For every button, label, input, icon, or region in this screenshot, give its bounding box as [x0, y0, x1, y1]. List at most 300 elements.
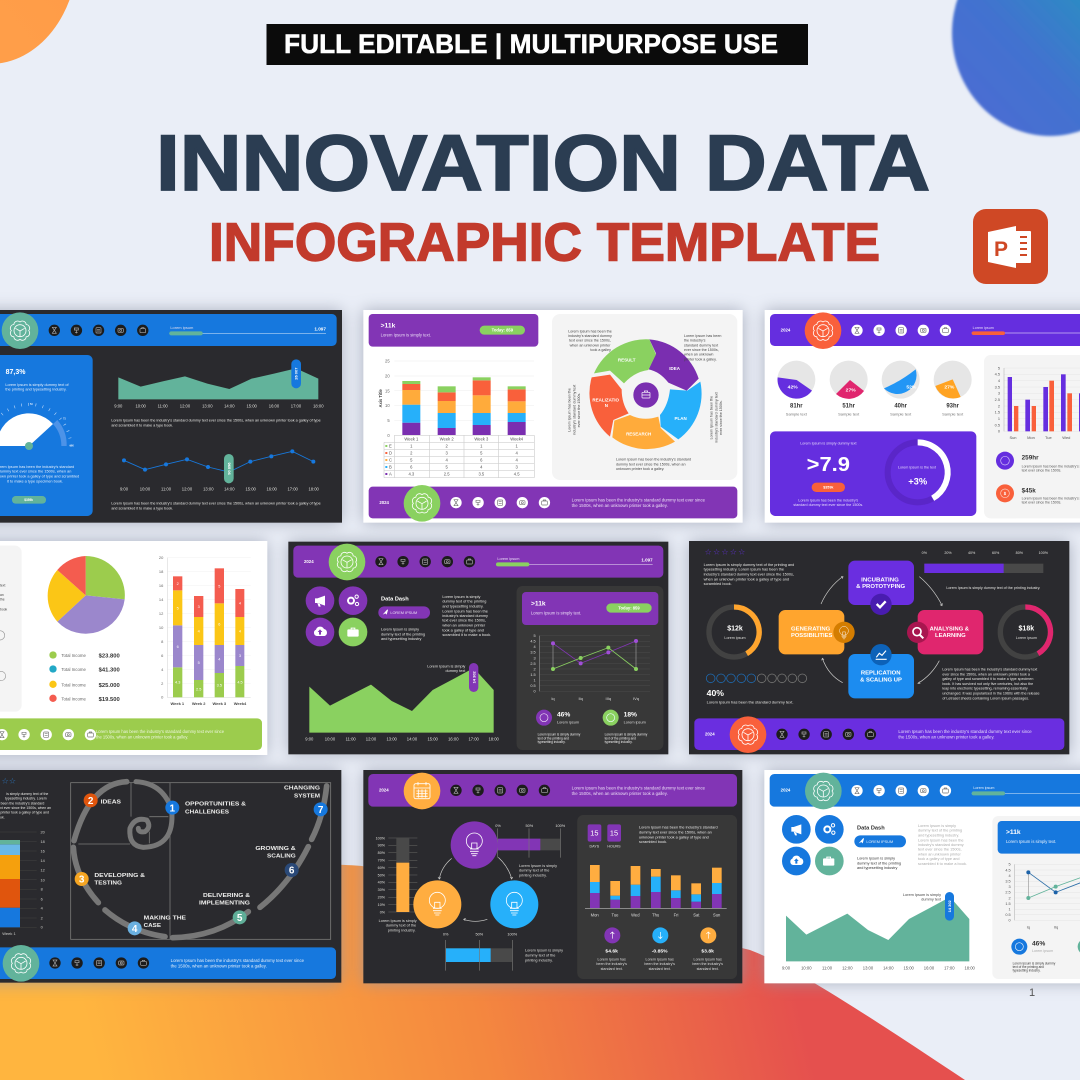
- stacked bar remnant: 16: [41, 849, 45, 853]
- slide 4: white pie chart: [0, 541, 267, 755]
- cycle panel: when an unknown: [684, 353, 713, 357]
- right panel: DAYS: [589, 844, 600, 848]
- area chart: and scrambled it to make a type book.: [111, 423, 173, 427]
- stacked bars: 4.5: [237, 680, 243, 684]
- cycle panel: ever since the 1500s.: [719, 400, 723, 435]
- purple KPI panel: $359k: [823, 486, 834, 490]
- data dash text: [854, 824, 967, 870]
- body text: unchanged. It was popularised in the 1960s with the release: [942, 691, 1040, 695]
- line chart: 15:00: [245, 486, 257, 491]
- stacked bar remnant: 2: [41, 916, 43, 920]
- line chart: 12:00: [182, 486, 193, 491]
- right panel with bars: 1.5: [995, 411, 1000, 415]
- thermometer bar: 20%: [378, 896, 386, 900]
- right panel with bars: 3.5: [995, 385, 1000, 389]
- data table: 5: [480, 451, 483, 456]
- progress bar: 0%: [922, 551, 928, 555]
- right panel: Lorem Ipsum is simply text.: [1006, 839, 1056, 844]
- data dash text: and typesetting industry.: [442, 605, 484, 609]
- area chart: 12:00: [842, 965, 853, 970]
- line chart: 11:00: [161, 486, 172, 491]
- gauge panel: 50: [30, 402, 33, 406]
- data dash text: and typesetting industry.: [918, 834, 959, 838]
- right panel: $4.6k: [605, 948, 618, 954]
- gradient wave background, bottom: [0, 864, 965, 1080]
- slide 6: dark cycle process: [689, 541, 1069, 754]
- area chart: 17:00: [468, 737, 480, 742]
- decorative blue blob, top right: [952, 0, 1080, 136]
- right panel with bars: Sun: [1009, 435, 1017, 440]
- area chart: 18:00: [488, 737, 500, 742]
- stacked bars: 12: [159, 611, 164, 616]
- right panel: Lorem Ipsum has: [646, 957, 674, 961]
- stacked bars: Week 1: [170, 701, 185, 706]
- stacked bars: 6: [161, 653, 164, 658]
- purple KPI panel: Lorem Ipsum is simply dummy text: [800, 442, 856, 446]
- right panel: Lorem ipsum: [1032, 949, 1053, 953]
- right panel: 1.5: [1005, 902, 1011, 906]
- bottom bar: 0%: [443, 933, 449, 937]
- data dash text: Lorem Ipsum has been the: [442, 609, 488, 613]
- data dash text: and typesetting industry: [857, 866, 898, 870]
- cycle panel: [552, 314, 737, 480]
- left panel remnant: an: [0, 593, 4, 597]
- legend: $41.300: [99, 668, 120, 674]
- star rating and intro: when an unknown printer took a galley of type and: [704, 577, 789, 581]
- data table: 2.5: [444, 472, 450, 477]
- area chart: [782, 892, 976, 970]
- purple KPI panel: Lorem Ipsum is the text: [898, 466, 936, 470]
- top bar: Lorem Ipsum is simply: [519, 864, 557, 868]
- cycle panel: REALIZATIO: [592, 398, 619, 403]
- step labels: MAKING THE: [144, 915, 186, 921]
- right panel: Iq: [551, 696, 555, 701]
- stacked bars: 6: [177, 645, 179, 649]
- footer bar: 2024: [379, 500, 390, 505]
- header bar: [0, 312, 337, 349]
- body text: Lorem Ipsum has been the industry's standard dummy text: [942, 668, 1037, 672]
- donut left: Lorem ipsum: [724, 636, 746, 640]
- thermometer bar: 70%: [378, 859, 386, 863]
- area chart: 11:00: [822, 965, 833, 970]
- data dash text: text ever since the 1500s,: [918, 848, 962, 852]
- step: incubating: INCUBATING: [861, 577, 899, 583]
- step labels: IMPLEMENTING: [199, 901, 251, 907]
- gauge panel: 87,3%: [6, 369, 26, 376]
- arrows between steps: [821, 577, 942, 684]
- area chart: 16:00: [924, 965, 935, 970]
- left caption: dummy text of the: [386, 924, 416, 928]
- progress bar: Lorem Ipsum is simply dummy text of the printing industry.: [946, 586, 1040, 590]
- pie gauges: 40hr: [894, 403, 908, 409]
- data table: D: [389, 451, 392, 456]
- right panel: [517, 586, 663, 750]
- right panel with bars: 2: [998, 404, 1000, 408]
- pie gauges: 81hr: [790, 403, 803, 409]
- data dash text: LOREM IPSUM: [866, 840, 893, 844]
- right panel: Mon: [591, 912, 599, 917]
- body text: of Letraset sheets containing Lorem Ipsum passages.: [942, 696, 1029, 700]
- bottom bar: dummy text of the: [525, 953, 555, 957]
- data dash text: Data Dash: [381, 597, 409, 603]
- area chart: 14 302: [471, 670, 476, 683]
- line chart: and scrambled it to make a type book.: [111, 506, 173, 510]
- right panel: -0.85%: [652, 948, 668, 954]
- line chart: 13:00: [203, 486, 214, 491]
- footer bar: the 1500s, when an unknown printer took a galley.: [171, 964, 267, 969]
- header card: >11k: [381, 323, 396, 330]
- right panel: 1: [534, 679, 536, 683]
- right panel with bars: $: [1004, 491, 1007, 496]
- stacked bars: 3: [198, 605, 200, 609]
- step badges: 1: [170, 803, 176, 814]
- step labels: DEVELOPING &: [94, 873, 145, 879]
- left panel remnant: book: [0, 607, 8, 611]
- stacked bar remnant: 6: [41, 897, 43, 901]
- step badges: 5: [237, 913, 243, 924]
- data dash text: industry's standard dummy: [918, 843, 964, 847]
- data table: Week 2: [440, 437, 454, 442]
- spiral path: [73, 782, 327, 938]
- thermometer bar: 40%: [378, 881, 386, 885]
- data table: 3.5: [478, 472, 485, 477]
- step badges: [75, 793, 328, 935]
- area chart: 12:00: [180, 403, 191, 408]
- header card: [369, 314, 538, 347]
- legend: Total Income: [61, 653, 86, 658]
- step badges: 3: [79, 875, 85, 886]
- line chart: 14:00: [224, 486, 235, 491]
- area chart: 10:00: [801, 965, 812, 970]
- area chart: 26 007: [294, 367, 299, 380]
- thermometer bar: 10%: [378, 903, 386, 907]
- footer bar: the 1500s, when an unknown printer took a galley.: [572, 503, 668, 508]
- gauge panel: Lorem Ipsum is simply dummy text of: [5, 383, 69, 387]
- stacked bars: 4.3: [175, 681, 180, 685]
- right panel: 15: [590, 829, 598, 838]
- line chart: [111, 449, 321, 510]
- area chart: 16:00: [269, 403, 280, 408]
- stacked bar chart: 5: [387, 418, 390, 423]
- right panel: Fri: [674, 912, 678, 917]
- right panel with bars: $45k: [1022, 487, 1036, 494]
- step: analysing: [907, 610, 983, 654]
- right panel: scrambled book.: [639, 840, 667, 844]
- cycle panel: industry's standard dummy text: [572, 385, 576, 435]
- area chart: 11:00: [158, 403, 168, 408]
- stacked bar remnant: 18: [41, 840, 45, 844]
- right panel: Lorem ipsum: [557, 720, 579, 724]
- stacked bars: 18: [159, 569, 164, 574]
- gauge panel: 100: [69, 444, 74, 448]
- stacked bars: 4: [239, 601, 242, 605]
- people pictogram, 40%: Lorem Ipsum has been the standard dummy text.: [707, 699, 793, 704]
- right panel: Lorem Ipsum has: [598, 957, 626, 961]
- cycle panel: Lorem Ipsum has been the: [568, 329, 612, 333]
- right panel: typesetting industry.: [538, 740, 566, 744]
- right panel with bars: 2.5: [995, 398, 1000, 402]
- star rating and intro: Lorem Ipsum is simply dummy text of the printing and: [704, 563, 794, 567]
- data table: 2: [410, 451, 413, 456]
- stacked bars: Week 2: [192, 701, 206, 706]
- area chart: 10:00: [135, 403, 147, 408]
- data table: Week4: [510, 437, 524, 442]
- thermometer bar: 30%: [378, 888, 386, 892]
- slide 3: white pie dashboard: [765, 310, 1080, 523]
- stacked bar remnant: 14: [41, 859, 46, 863]
- right panel: Lorem Ipsum has been the industry's standard: [639, 826, 718, 830]
- right panel: 0: [1009, 919, 1011, 923]
- data dash text: LOREM IPSUM: [390, 611, 417, 615]
- data dash text: Lorem Ipsum is simply: [918, 824, 956, 828]
- right panel: IIIq: [606, 696, 611, 701]
- header bar: the 1500s, when an unknown printer took a galley.: [572, 791, 668, 796]
- right panel: Wed: [631, 912, 640, 917]
- slide 9: white data dash: [764, 770, 1080, 983]
- gauge panel: dummy text ever since the 1500s, when an: [0, 470, 71, 474]
- right panel: HOURS: [607, 844, 621, 848]
- cycle panel: Lorem Ipsum has been the industry's standard: [616, 458, 691, 462]
- header card: Today: 859: [492, 328, 514, 333]
- title: INNOVATION DATA: [156, 118, 930, 207]
- cycle panel: Lorem Ipsum has been the: [710, 396, 714, 439]
- step labels: OPPORTUNITIES &: [185, 802, 246, 808]
- pie gauges: 93hr: [946, 403, 960, 409]
- stacked bars: 20: [159, 555, 164, 560]
- right panel: typesetting industry.: [1013, 969, 1041, 973]
- pie gauges: Sample text: [838, 411, 860, 416]
- data table: 6: [410, 465, 413, 470]
- right panel: >11k: [1006, 829, 1021, 836]
- progress bar: 60%: [992, 551, 1000, 555]
- right panel: 15: [610, 829, 618, 838]
- footer bar: Lorem Ipsum has been the industry's standard dummy text ever since: [898, 729, 1032, 734]
- right panel: 4: [1009, 874, 1012, 878]
- step: generating: [779, 610, 855, 654]
- stacked bar chart: 10: [385, 403, 390, 408]
- data dash text: Lorem Ipsum is simply: [381, 628, 419, 632]
- area chart: 14:00: [407, 737, 418, 742]
- area chart: 15:00: [427, 737, 439, 742]
- stacked bars: 2: [161, 681, 164, 686]
- right panel: 0.5: [1005, 913, 1011, 917]
- footer bar: the 1500s, when an unknown printer took a galley.: [96, 734, 188, 739]
- stacked bars: 4: [239, 629, 242, 633]
- area chart: 18:00: [313, 403, 324, 408]
- right panel: Lorem Ipsum is simply dummy: [1013, 961, 1056, 965]
- data table: 5: [410, 458, 413, 463]
- pie gauges: 27%: [846, 388, 856, 394]
- right panel: been the industry's: [596, 962, 627, 966]
- legend: Total Income: [61, 696, 86, 701]
- purple KPI panel: standard dummy text ever since the 1500s.: [793, 503, 863, 507]
- area chart: 12:00: [366, 737, 377, 742]
- header bar: [770, 773, 1080, 809]
- step labels: TESTING: [94, 881, 123, 887]
- icon: PowerPoint: P: [994, 238, 1008, 261]
- stacked bar chart: [378, 359, 534, 438]
- cycle panel: RESULT: [618, 357, 636, 362]
- slide 7: dark spiral process: [0, 770, 341, 983]
- right panel with bars: 0.5: [995, 423, 1000, 427]
- area chart: 17:00: [291, 403, 302, 408]
- stars and intro: been the industry's standard: [1, 801, 44, 805]
- step: generating: GENERATING: [791, 627, 830, 633]
- star rating and intro: scrambled book.: [704, 582, 732, 586]
- right panel: >11k: [531, 600, 546, 607]
- banner: full editable: FULL EDITABLE | MULTIPURPOSE USE: [284, 29, 778, 59]
- area chart: Lorem Ipsum is simply: [427, 664, 465, 668]
- data table: 4.5: [514, 472, 520, 477]
- cycle panel: unknown printer took a galley.: [616, 467, 664, 471]
- header bar: 1.097: [641, 557, 653, 562]
- right panel: 1: [1009, 908, 1011, 912]
- stacked bars: 3: [239, 654, 241, 658]
- step badges: 2: [88, 796, 94, 807]
- right panel: Lorem Ipsum is simply dummy: [605, 733, 648, 737]
- step labels: CASE: [144, 923, 161, 929]
- header bar: 2024: [304, 559, 314, 564]
- thermometer bar: 0%: [380, 910, 386, 914]
- slide shadows: [0, 310, 1080, 983]
- stacked bars: 4: [198, 629, 201, 633]
- left panel remnant: [0, 546, 22, 712]
- banner: full editable: [266, 24, 808, 65]
- data dash text: took a galley of type and: [442, 628, 484, 632]
- body text: book. It has survived not only five centuries, but also the: [942, 682, 1033, 686]
- stacked bar remnant: 12: [41, 869, 45, 873]
- left panel remnant: text: [0, 584, 5, 588]
- data table: 1: [516, 444, 519, 449]
- area chart: dummy text: [921, 898, 942, 902]
- header bar: Lorem ipsum: [973, 326, 994, 330]
- stacked bar chart: 25: [385, 359, 390, 364]
- legend: Total Income: [61, 667, 86, 672]
- pie gauges: 52%: [906, 385, 917, 391]
- purple KPI panel: Lorem Ipsum has been the industry's: [798, 498, 858, 502]
- header bar: Lorem ipsum: [170, 325, 194, 330]
- right panel: IVq: [633, 696, 639, 701]
- data table: 4.3: [408, 472, 415, 477]
- progress bar: 40%: [968, 551, 976, 555]
- data dash text: and typesetting industry: [381, 637, 422, 641]
- header bar: Lorem ipsum: [973, 786, 994, 790]
- footer bar: Lorem Ipsum has been the industry's standard dummy text ever since: [572, 497, 706, 502]
- data dash text: when an unknown printer: [442, 624, 486, 628]
- people pictogram, 40%: [706, 674, 807, 704]
- area chart: 9:00: [114, 403, 123, 408]
- step labels: SCALING: [267, 854, 296, 860]
- right panel: 2: [534, 667, 536, 671]
- right panel: $3.8k: [701, 948, 714, 954]
- pie gauges: [777, 361, 972, 416]
- step badges: 7: [318, 805, 324, 816]
- data dash text: dummy text of the printing: [381, 632, 425, 636]
- stacked bars: 14: [159, 597, 164, 602]
- right panel: text of the printing and: [538, 736, 569, 740]
- stacked bar chart: 20: [385, 373, 390, 378]
- data table: 4: [446, 458, 449, 463]
- data dash text: dummy text of the printing: [857, 861, 901, 865]
- right panel with bars: 4: [998, 379, 1001, 383]
- bottom bar: Lorem Ipsum is simply: [525, 949, 563, 953]
- right panel: 4.5: [1005, 868, 1011, 872]
- left caption: [379, 919, 417, 932]
- stacked bars: 10: [159, 625, 164, 630]
- right panel: Tue: [611, 912, 619, 917]
- bottom bar: 100%: [507, 933, 518, 937]
- stars and intro: is simply dummy text of the: [6, 792, 48, 796]
- right panel: 5: [1009, 863, 1011, 867]
- cycle panel: ever since the 1500s,: [684, 348, 719, 352]
- area chart: 13:00: [386, 737, 398, 742]
- step: replication: REPLICATION: [861, 671, 901, 677]
- left caption: printing industry.: [388, 928, 416, 932]
- cycle panel: PLAN: [675, 416, 687, 421]
- header bar: 2024: [781, 327, 791, 332]
- thermometer bar: 50%: [378, 873, 386, 877]
- data table: 4: [480, 465, 483, 470]
- purple KPI panel: [770, 431, 976, 516]
- right panel with bars: 3: [998, 392, 1000, 396]
- step labels: GROWING &: [255, 846, 296, 852]
- right panel: been the industry's: [692, 962, 723, 966]
- data dash text: scrambled it to make a book.: [442, 633, 491, 637]
- right panel: Today: 859: [618, 606, 640, 611]
- donut right: Lorem ipsum: [1016, 636, 1037, 640]
- slide 1: dark gauge dashboard: [0, 310, 342, 523]
- cycle panel: IDEA: [669, 366, 681, 371]
- right panel: 3.5: [530, 651, 536, 655]
- right panel: Thu: [652, 912, 660, 917]
- step: analysing: LEARNING: [935, 633, 966, 639]
- right panel with bars: 0: [998, 430, 1000, 434]
- data table: C: [389, 458, 392, 463]
- right panel: standard text.: [601, 967, 623, 971]
- bulb circles: [413, 821, 538, 928]
- people pictogram, 40%: 40%: [707, 688, 724, 698]
- donut right: $18k: [1019, 626, 1034, 633]
- right panel: IIq: [578, 696, 583, 701]
- stacked bars: 5: [177, 606, 179, 610]
- line chart: Lorem Ipsum has been the industry's standard dummy text ever since the 1500s, when an unknown printer took a galley of type: [111, 502, 321, 506]
- left caption: Lorem Ipsum is simply: [379, 919, 417, 923]
- right panel with bars: 1: [998, 417, 1000, 421]
- area chart: 13:00: [202, 403, 213, 408]
- step badges: 4: [132, 924, 138, 935]
- stacked bar chart: Axis Title: [378, 388, 383, 408]
- right panel: 3: [534, 656, 536, 660]
- right panel: 4: [534, 645, 537, 649]
- cycle panel: ever since the 1500s.: [577, 393, 581, 427]
- data dash text: dummy text of the printing: [918, 829, 962, 833]
- header bar: [770, 312, 1080, 349]
- star rating and intro: ☆☆☆☆☆: [705, 548, 745, 557]
- stacked bar remnant: 20: [41, 830, 45, 834]
- progress bar: [922, 551, 1049, 590]
- right panel: 3: [1009, 885, 1011, 889]
- thermometer bar: 90%: [378, 844, 386, 848]
- step labels: DELIVERING &: [203, 893, 250, 899]
- right panel: 2.5: [530, 662, 536, 666]
- stacked bar remnant: 10: [41, 878, 45, 882]
- left panel remnant: the: [0, 598, 5, 602]
- header bar: 1.097: [314, 326, 326, 331]
- area chart: 10:00: [325, 737, 336, 742]
- star rating and intro: [704, 548, 794, 586]
- donut left: [709, 607, 759, 657]
- progress bar: 20%: [944, 551, 952, 555]
